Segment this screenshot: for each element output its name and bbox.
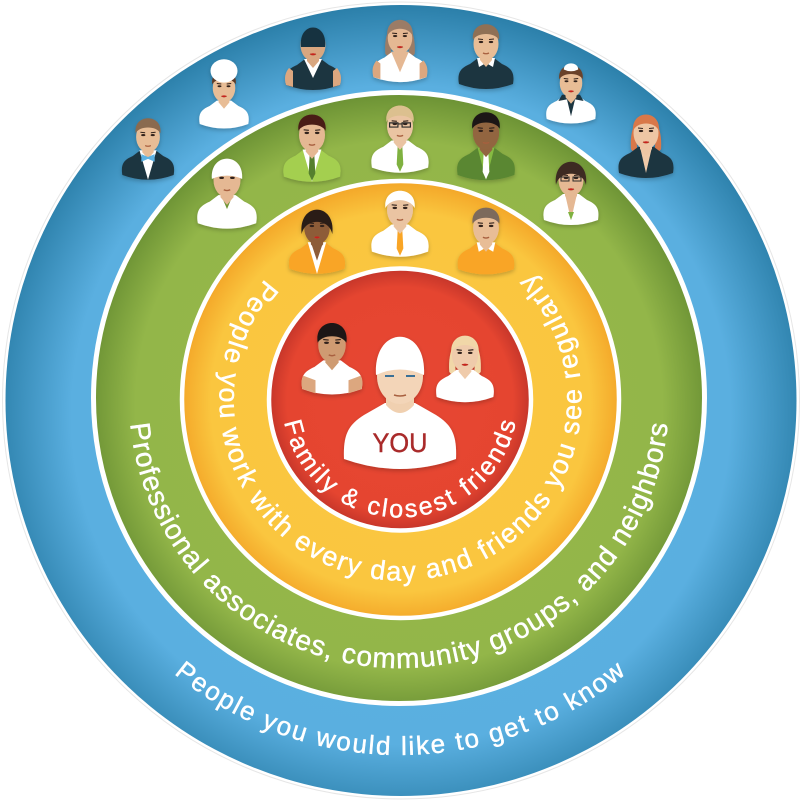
person: blonde woman [436, 336, 494, 402]
person: red haired woman [618, 114, 674, 178]
person: white cap worker [197, 159, 257, 229]
text: YOU: YOU [372, 428, 428, 458]
panel: green ring [94, 92, 704, 704]
group: yellow ring people [289, 191, 514, 274]
person: man in light green jacket [283, 114, 341, 182]
person: you [344, 337, 456, 469]
label: blue ring text: People you would like to get to know [175, 660, 624, 756]
person: blond man with glasses [371, 105, 429, 173]
person: long haired woman in white top [373, 20, 427, 82]
person: man in orange sweater [458, 208, 514, 274]
person: white haired man with orange tie [371, 191, 429, 257]
person: dark haired man [302, 323, 362, 394]
label: red core text: Family & closest friends [284, 420, 516, 518]
person: woman in dark top with dark hat [285, 28, 341, 90]
label: yellow ring text: People you work with every day and friends you see regularly [215, 276, 582, 586]
person: man in dark sweater [458, 24, 514, 89]
person: woman in chef hat [199, 59, 249, 128]
person: dark skinned man in dark green jacket [457, 112, 515, 180]
panel: red core [269, 268, 531, 530]
panel: yellow ring [182, 181, 619, 618]
group: red core people [302, 323, 494, 469]
person: flight attendant [546, 63, 596, 124]
group: green ring people [197, 105, 599, 229]
person: woman with glasses [543, 162, 599, 225]
group: outer ring people [122, 20, 674, 180]
person: dark skinned woman in orange [289, 210, 345, 274]
label: green ring text: Professional associates, community groups, and neighbors [130, 423, 668, 668]
person: man with bow tie [122, 118, 174, 180]
